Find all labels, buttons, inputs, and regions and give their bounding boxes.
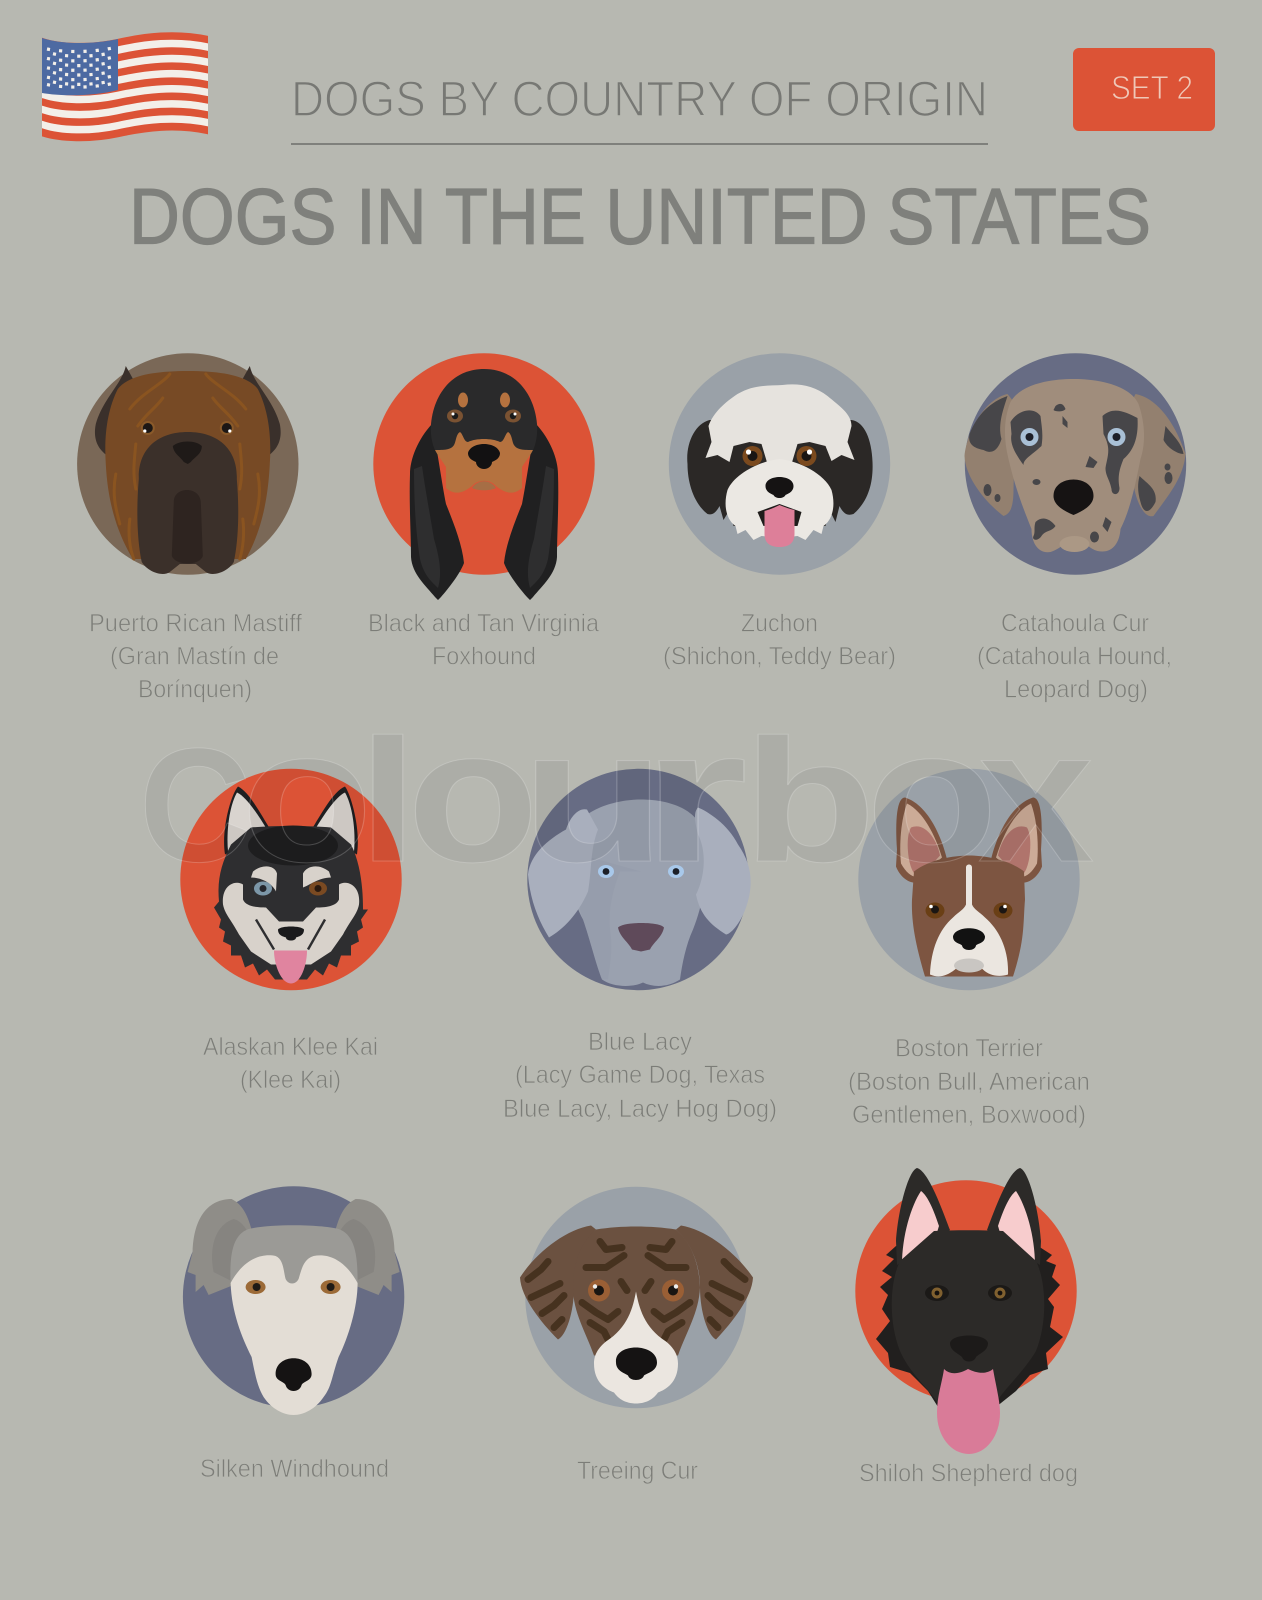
- panel: Puerto Rican Mastiff: [77, 353, 298, 575]
- eyes: [926, 902, 1012, 918]
- nose: [953, 928, 985, 950]
- label: Blue Lacy: (Lacy Game Dog, Texas: [515, 1061, 765, 1089]
- eyes: [254, 882, 327, 896]
- tongue: [937, 1369, 1000, 1454]
- head: [105, 371, 270, 559]
- white face: [231, 1255, 358, 1415]
- eyes: [742, 446, 816, 466]
- label: Catahoula Cur: [977, 610, 1172, 704]
- darker muzzle band: [576, 854, 641, 980]
- black head with fur: [214, 826, 368, 980]
- label: Catahoula Cur: Catahoula Cur: [1001, 610, 1149, 638]
- background circle: [965, 353, 1186, 575]
- eyes: [925, 1285, 1012, 1301]
- panel: Treeing Cur: [520, 1187, 753, 1408]
- ears: [188, 1199, 400, 1295]
- background circle: [183, 1186, 404, 1408]
- watermark: Colourbox: C: [139, 715, 251, 896]
- label: Alaskan Klee Kai: Alaskan Klee Kai: [203, 1033, 378, 1061]
- label: Blue Lacy: Blue Lacy: [588, 1028, 692, 1056]
- background circle: [669, 353, 890, 575]
- white muzzle and blaze: [930, 864, 1008, 976]
- badge: set 2: [1073, 48, 1215, 131]
- panel: Blue Lacy: [527, 769, 751, 990]
- title: dogs in the united states: DOGS IN THE UNITED STATES: [129, 172, 1151, 261]
- white muzzle: [726, 459, 833, 540]
- label: Boston Terrier: (Boston Bull, American: [848, 1068, 1090, 1096]
- panel: Boston Terrier: [858, 769, 1080, 990]
- panel: Catahoula Cur: [964, 353, 1186, 575]
- panel: Alaskan Klee Kai: [180, 769, 402, 990]
- ears: [896, 1168, 1041, 1265]
- head: [431, 369, 537, 450]
- panel: Black and Tan Virginia Foxhound: [373, 353, 595, 600]
- label: Zuchon: (Shichon, Teddy Bear): [663, 642, 896, 670]
- muzzle: [137, 432, 238, 574]
- subtitle: dogs by country of origin: DOGS BY COUNTRY OF ORIGIN: [291, 71, 988, 127]
- background circle: [180, 769, 402, 990]
- watermark: Colourbox: o: [866, 690, 998, 902]
- label: Alaskan Klee Kai: (Klee Kai): [240, 1066, 341, 1094]
- ears: [964, 394, 1186, 516]
- label: Puerto Rican Mastiff: [89, 610, 302, 704]
- brindle stripes: [528, 1242, 745, 1344]
- watermark: Colourbox: r: [641, 690, 748, 902]
- background circle: [77, 353, 298, 575]
- tongue: [274, 950, 307, 984]
- label: Boston Terrier: Boston Terrier: [895, 1035, 1043, 1063]
- watermark: Colourbox: [139, 690, 1094, 902]
- dark merle spots: [969, 396, 1184, 542]
- tan muzzle: [435, 432, 533, 493]
- head: [573, 1226, 700, 1356]
- background circle: [373, 353, 595, 575]
- eyes: [588, 1280, 684, 1302]
- watermark: Colourbox: l: [358, 704, 418, 899]
- nose: [766, 477, 794, 498]
- watermark: Colourbox: u: [521, 690, 666, 902]
- background circle: [855, 1180, 1077, 1402]
- brow patches: [251, 866, 331, 892]
- nose: [1054, 480, 1094, 515]
- watermark: Colourbox: o: [241, 690, 373, 902]
- chin shading: [954, 958, 984, 972]
- label: Boston Terrier: [848, 1035, 1090, 1129]
- label: Puerto Rican Mastiff: Puerto Rican Mastiff: [89, 610, 302, 638]
- dark forehead: [248, 826, 338, 866]
- eyes: [246, 1280, 341, 1294]
- mouth: [758, 504, 802, 526]
- ears: [896, 798, 1042, 883]
- white cheeks: [223, 883, 359, 964]
- head: [1005, 379, 1144, 552]
- label: Puerto Rican Mastiff: (Gran Mastín de: [110, 642, 279, 670]
- chin: [472, 481, 496, 490]
- chin: [1060, 536, 1090, 552]
- eyes: [141, 421, 234, 435]
- white blaze and muzzle: [594, 1292, 678, 1404]
- label: Alaskan Klee Kai: [203, 1033, 378, 1094]
- label: Black and Tan Virginia Foxhound: [368, 610, 599, 670]
- ears: [224, 786, 358, 854]
- head: [569, 800, 706, 986]
- badge: set 2: SET 2: [1111, 69, 1193, 106]
- nose: [618, 923, 664, 952]
- watermark: Colourbox: x: [978, 690, 1094, 902]
- label: Catahoula Cur: Leopard Dog): [1004, 676, 1148, 704]
- ears: [520, 1226, 753, 1340]
- panel: Zuchon: [669, 353, 890, 575]
- icon: waving American flag: [30, 36, 220, 137]
- label: Treeing Cur: Treeing Cur: [577, 1457, 698, 1485]
- background circle: [525, 1187, 747, 1408]
- label: Puerto Rican Mastiff: Borínquen): [138, 676, 252, 704]
- label: Boston Terrier: Gentlemen, Boxwood): [852, 1101, 1086, 1129]
- watermark: Colourbox: b: [743, 704, 876, 899]
- eyes: [598, 865, 684, 878]
- label: Black and Tan Virginia Foxhound: Black and Tan Virginia: [368, 610, 599, 638]
- ears: [528, 808, 751, 938]
- watermark: Colourbox: o: [407, 690, 539, 902]
- outer fur: [876, 1246, 1063, 1407]
- long ears: [410, 424, 558, 600]
- nose: [950, 1336, 988, 1362]
- nose: [173, 442, 202, 464]
- label: Blue Lacy: Blue Lacy, Lacy Hog Dog): [503, 1095, 777, 1123]
- ears: [95, 366, 281, 456]
- smile lines: [256, 920, 325, 950]
- wrinkles: [114, 374, 259, 559]
- eyes: [447, 410, 521, 422]
- nose: [616, 1348, 657, 1380]
- label: Silken Windhound: Silken Windhound: [200, 1455, 389, 1483]
- white top fluff: [706, 384, 854, 464]
- nose: [276, 1358, 312, 1391]
- background circle: [858, 769, 1080, 990]
- brown head: [912, 856, 1025, 976]
- label: Shiloh Shepherd dog: Shiloh Shepherd dog: [859, 1460, 1078, 1488]
- background circle: [527, 769, 749, 990]
- panel: Silken Windhound: [183, 1186, 404, 1415]
- eyes: [1020, 428, 1126, 446]
- tongue: [764, 505, 794, 547]
- brow spots: [458, 392, 510, 408]
- grey head top: [230, 1225, 358, 1307]
- label: Black and Tan Virginia Foxhound: Foxhound: [432, 642, 536, 670]
- label: Zuchon: Zuchon: [741, 610, 818, 638]
- label: Catahoula Cur: (Catahoula Hound,: [977, 642, 1172, 670]
- label: Zuchon: [663, 610, 896, 670]
- label: Blue Lacy: [503, 1028, 777, 1123]
- panel: Shiloh Shepherd dog: [855, 1168, 1077, 1454]
- head: [892, 1230, 1044, 1407]
- nose: [278, 926, 304, 940]
- nose: [468, 444, 500, 469]
- black ears and mask: [687, 420, 873, 526]
